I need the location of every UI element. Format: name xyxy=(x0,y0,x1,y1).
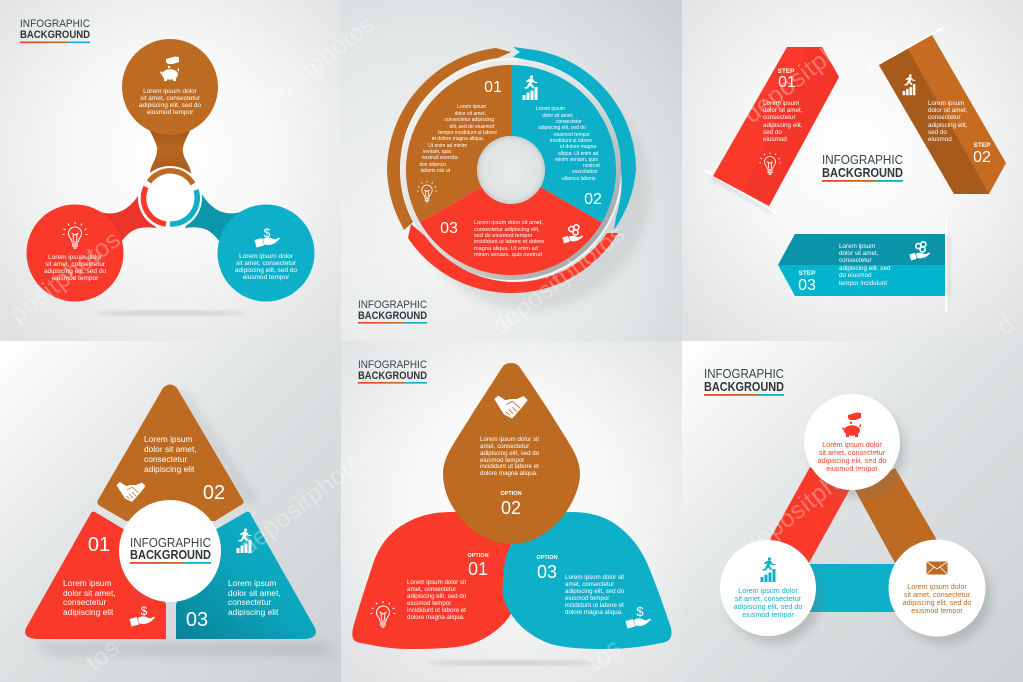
text block: Lorem ipsum dolor sit amet, xyxy=(474,220,543,226)
text block: Lorem ipsum xyxy=(536,106,565,112)
text block xyxy=(235,253,297,281)
icon: hand with dollar: $ xyxy=(141,604,148,618)
text block: adipiscing elit, sed do xyxy=(139,102,201,109)
text block: sit amet, consectetur xyxy=(904,590,971,599)
centre circle with heading xyxy=(119,500,221,602)
icon: hand with dollar xyxy=(130,604,155,626)
donut shadow xyxy=(410,70,650,310)
step label xyxy=(798,270,816,294)
brand heading: INFOGRAPHIC xyxy=(358,359,427,371)
text block: Lorem ipsum xyxy=(63,578,111,588)
icon: runner on bars xyxy=(760,557,776,582)
text block: eiusmod tempor xyxy=(480,457,524,464)
icon: hand with dollar xyxy=(626,604,651,628)
text block: eiusmod xyxy=(928,136,952,143)
segment: brown xyxy=(406,65,511,223)
text block: consectetur adipiscing xyxy=(445,117,494,123)
text block xyxy=(228,578,281,617)
text block: dolor sit amet, xyxy=(144,444,197,454)
icon: envelope xyxy=(926,562,948,574)
text block: adipiscing elit, sed xyxy=(839,265,891,272)
text block: Lorem ipsum dolor xyxy=(738,586,798,595)
text block: amet, consectetur xyxy=(565,581,614,588)
number: 03 xyxy=(186,609,208,631)
brand heading: BACKGROUND xyxy=(704,379,784,394)
stock watermark: positphotos xyxy=(4,225,126,329)
step label: 03 xyxy=(798,277,816,294)
text block: eiusmod tempor xyxy=(147,109,194,116)
text block: dolore magna aliqua. xyxy=(480,470,538,477)
text block: aliqua. Ut enim ad xyxy=(558,151,599,157)
text block xyxy=(407,579,467,621)
text block: amet, consectetur xyxy=(480,443,529,450)
text block: adipiscing elit, sed do xyxy=(818,456,886,465)
text block: tempor incididunt xyxy=(839,280,887,287)
text block: adipiscing elit xyxy=(228,607,279,617)
text block: Lorem ipsum xyxy=(763,100,799,107)
arrow: brown xyxy=(387,48,511,230)
text block: incididunt ut labore et dolore xyxy=(474,239,544,245)
text block xyxy=(763,100,803,143)
text block xyxy=(928,100,968,143)
text block: consectetur xyxy=(839,257,872,264)
grey ring xyxy=(404,62,618,278)
centre circle with heading: BACKGROUND xyxy=(130,547,211,562)
number: 02 xyxy=(203,482,225,504)
text block: adipiscing elit, sed do xyxy=(44,268,106,275)
text block: incididunt ut labore et xyxy=(480,463,539,470)
text block xyxy=(818,440,886,473)
text block: dolor sit amet, xyxy=(455,111,486,117)
text block: adipiscing elit xyxy=(63,607,114,617)
brand heading xyxy=(20,18,90,43)
centre circle with heading: INFOGRAPHIC xyxy=(130,535,211,550)
floor shadow xyxy=(95,311,245,315)
brand heading xyxy=(358,299,427,324)
text block: sit amet, consectetur xyxy=(819,448,886,457)
long shadows xyxy=(32,390,338,656)
brand heading: INFOGRAPHIC xyxy=(20,18,90,30)
circle: right xyxy=(888,540,986,636)
petal: red xyxy=(352,512,511,649)
icon: light bulb xyxy=(759,152,781,174)
floor shadow xyxy=(426,661,596,665)
text block: ullamco laboris xyxy=(562,176,596,182)
stock watermark: depositphotos xyxy=(236,10,380,131)
text block: minim veniam, quis nostrud xyxy=(474,252,542,258)
text block: elit, sed do eiusmod xyxy=(450,124,494,130)
option label: OPTION xyxy=(467,553,489,559)
icon: hand with dollar: $ xyxy=(636,604,644,619)
text block: Lorem ipsum dolor sit xyxy=(407,579,466,586)
white ring xyxy=(399,58,623,282)
stock watermark: depositphotos xyxy=(234,440,378,561)
number: 02 xyxy=(584,191,602,208)
text block: eiusmod tempor xyxy=(52,275,99,282)
circle: right xyxy=(218,204,314,302)
brand heading: BACKGROUND xyxy=(20,29,90,41)
petal: brown xyxy=(443,363,580,544)
text block: consectetur xyxy=(928,114,961,121)
text block xyxy=(734,586,802,619)
text block: dolor sit amet, xyxy=(839,250,879,257)
text block: tion ullamco xyxy=(419,162,446,168)
circle: left xyxy=(720,540,816,636)
text block: Lorem ipsum dolor sit xyxy=(480,436,539,443)
centre hole xyxy=(477,136,545,204)
text block: eiusmod tempor xyxy=(911,606,963,615)
stock watermark: d xyxy=(991,310,1020,341)
text block: eiusmod tempor xyxy=(742,610,794,619)
text block: incididunt ut labore et xyxy=(565,602,624,609)
band: teal xyxy=(805,564,900,612)
option label: OPTION xyxy=(536,555,558,561)
text block: sit amet, consectetur xyxy=(140,95,201,102)
text block: eiusmod xyxy=(763,136,787,143)
triangle: teal xyxy=(176,512,316,639)
text block: consectetur xyxy=(144,454,188,464)
arm: right xyxy=(185,193,241,244)
text block: eiusmod tempor xyxy=(243,274,290,281)
text block xyxy=(144,434,197,474)
text block: dolor sit amet, xyxy=(542,113,573,119)
brand heading: BACKGROUND xyxy=(358,310,427,322)
text block: minim veniam, quis xyxy=(555,157,598,163)
brand heading xyxy=(358,359,427,384)
text block: et dolore magna aliqua. xyxy=(432,136,484,142)
text block: adipiscing elit, sed do xyxy=(565,588,625,595)
number: 03 xyxy=(440,220,458,237)
panel: three petal shapes xyxy=(341,341,682,682)
text block: veniam, quis xyxy=(423,149,451,155)
text block: Lorem ipsum xyxy=(144,434,192,444)
text block: Lorem ipsum dolor xyxy=(48,254,103,261)
text block: sit amet, consectetur xyxy=(45,261,106,268)
text block: et dolore magna xyxy=(560,144,596,150)
arrow: step 2 xyxy=(879,35,1006,194)
text block: consectetur xyxy=(556,119,582,125)
icon: hand with dollar: $ xyxy=(264,226,271,240)
step label: STEP xyxy=(974,142,991,149)
text block: dolor sit amet, xyxy=(928,107,968,114)
text block: sed do eiusmod tempor xyxy=(474,233,533,239)
text block: magna aliqua. Ut enim ad xyxy=(474,246,538,252)
step label: 01 xyxy=(778,74,796,91)
panel: triangle of bands and white circles xyxy=(682,341,1023,682)
petal: teal xyxy=(502,512,672,649)
segment: red xyxy=(420,187,602,275)
text block: incididunt ut labore et xyxy=(407,607,466,614)
text block: adipiscing elit, xyxy=(763,122,803,129)
brand heading: BACKGROUND xyxy=(822,165,903,180)
panel: circles with connected arms xyxy=(0,0,341,341)
panel: triangle split in three xyxy=(0,341,341,682)
icon: handshake xyxy=(494,396,528,418)
text block: amet, consectetur xyxy=(407,586,456,593)
paper slit highlights xyxy=(705,28,946,312)
central ring with arrows xyxy=(138,166,202,230)
brand heading: INFOGRAPHIC xyxy=(358,299,427,311)
text block: adipiscing elit, sed do xyxy=(480,450,540,457)
text block xyxy=(474,220,544,258)
text block: consectetur adipiscing elit, xyxy=(474,227,540,233)
stock watermark: tos xyxy=(80,633,125,677)
text block xyxy=(536,106,600,182)
text block xyxy=(903,582,971,615)
text block: consectetur xyxy=(763,114,796,121)
arm: left xyxy=(100,193,156,244)
icon: light bulb xyxy=(62,222,88,248)
text block: adipiscing elit, sed do xyxy=(903,598,971,607)
text block: laboris nisi ut xyxy=(421,168,451,174)
text block: incididunt ut labore xyxy=(550,138,592,144)
option label: 02 xyxy=(501,498,521,518)
icon: handshake xyxy=(116,482,146,502)
stock watermark: depositphotos xyxy=(738,8,882,129)
band: brown xyxy=(855,468,937,563)
text block: Lorem ipsum xyxy=(228,578,276,588)
text block xyxy=(139,88,201,116)
text block: Lorem ipsum dolor xyxy=(143,88,198,95)
brand heading: BACKGROUND xyxy=(358,370,427,382)
text block: adipiscing elit, sed do xyxy=(538,125,586,131)
triangle: brown xyxy=(97,384,244,521)
icon: hand with gears xyxy=(562,225,583,244)
text block xyxy=(44,254,106,282)
text block: sed do xyxy=(763,129,782,136)
option label: OPTION xyxy=(500,491,522,497)
panel: three folded arrows xyxy=(682,0,1023,341)
text block: Lorem ipsum dolor xyxy=(239,253,294,260)
text block: Lorem ipsum xyxy=(928,100,964,107)
text block: adipiscing elit, xyxy=(928,122,968,129)
arrow: step 3 xyxy=(778,234,945,296)
text block xyxy=(565,574,625,616)
number: 01 xyxy=(88,534,110,556)
text block: eiusmod tempor xyxy=(565,595,609,602)
icon: hand with gears xyxy=(909,242,930,260)
brand heading xyxy=(822,152,903,182)
stock watermark: depositphotos xyxy=(738,440,882,561)
icon: piggy bank xyxy=(160,56,179,81)
text block: sit amet, consectetur xyxy=(735,594,802,603)
step label: STEP xyxy=(778,68,795,75)
text block: consectetur xyxy=(63,597,107,607)
arm: top xyxy=(146,122,194,174)
text block: dolore magna aliqua. xyxy=(407,614,465,621)
stock watermark: depositphotos xyxy=(486,220,630,341)
text block: Lorem ipsum xyxy=(457,104,486,110)
text block: eiusmod tempor xyxy=(554,132,590,138)
arrow slit shadows xyxy=(712,37,948,296)
brand heading xyxy=(704,366,784,396)
text block: dolor sit amet, xyxy=(763,107,803,114)
text block: eiusmod tempor xyxy=(407,600,451,607)
text block: sit amet, consectetur xyxy=(236,260,297,267)
text block: sed do xyxy=(928,129,947,136)
brand heading: INFOGRAPHIC xyxy=(704,366,784,381)
panel: segmented donut with arrows xyxy=(341,0,682,341)
step label xyxy=(973,142,991,166)
icon: runner on bars xyxy=(903,74,915,95)
arrow: teal xyxy=(513,47,636,230)
icon: runner on bars xyxy=(522,75,538,100)
option label: 03 xyxy=(537,562,557,582)
segment: teal xyxy=(511,65,616,223)
step label: STEP xyxy=(799,270,816,277)
text block: Ut enim ad minim xyxy=(428,143,467,149)
text block: nostrud exercita- xyxy=(422,155,459,161)
triangle: red xyxy=(25,512,166,639)
circle: top xyxy=(804,394,900,490)
text block: dolor sit amet, xyxy=(228,588,281,598)
text block: Lorem ipsum dolor sit xyxy=(565,574,624,581)
stock watermark: tos xyxy=(582,633,627,677)
step label: 02 xyxy=(973,149,991,166)
icon: runner on bars xyxy=(236,528,252,553)
text block: Lorem ipsum dolor xyxy=(822,440,882,449)
text block: adipiscing elit, sed do xyxy=(407,593,467,600)
icon: piggy bank xyxy=(842,412,861,437)
arrow: step 1 xyxy=(713,47,839,206)
circle: left xyxy=(26,204,124,302)
brand heading: INFOGRAPHIC xyxy=(822,152,903,167)
text block xyxy=(480,436,540,477)
text block: Lorem ipsum dolor xyxy=(907,582,967,591)
text block: exercitation xyxy=(572,169,598,175)
text block xyxy=(839,243,891,287)
icon: light bulb xyxy=(417,181,437,202)
text block: Lorem ipsum xyxy=(839,243,875,250)
text block: dolore magna aliqua. xyxy=(565,609,623,616)
icon: light bulb xyxy=(370,601,396,627)
text block: dolor sit amet, xyxy=(63,588,116,598)
text block: consectetur xyxy=(228,597,272,607)
text block: tempor incididunt ut labore xyxy=(438,130,497,136)
number: 01 xyxy=(484,79,502,96)
circle shadows xyxy=(728,403,991,644)
text block xyxy=(63,578,116,617)
text block: adipiscing elit, sed do xyxy=(235,267,297,274)
option label: 01 xyxy=(468,559,488,579)
text block: do eiusmod xyxy=(839,272,872,279)
text block: eiusmod tempor xyxy=(826,464,878,473)
text block: adipiscing elit xyxy=(144,464,195,474)
text block: nostrud xyxy=(583,163,600,169)
band: red xyxy=(769,467,850,563)
circle: top xyxy=(122,39,218,135)
text block xyxy=(419,104,497,174)
text block: adipiscing elit, sed do xyxy=(734,602,802,611)
arrow: red xyxy=(408,224,618,293)
